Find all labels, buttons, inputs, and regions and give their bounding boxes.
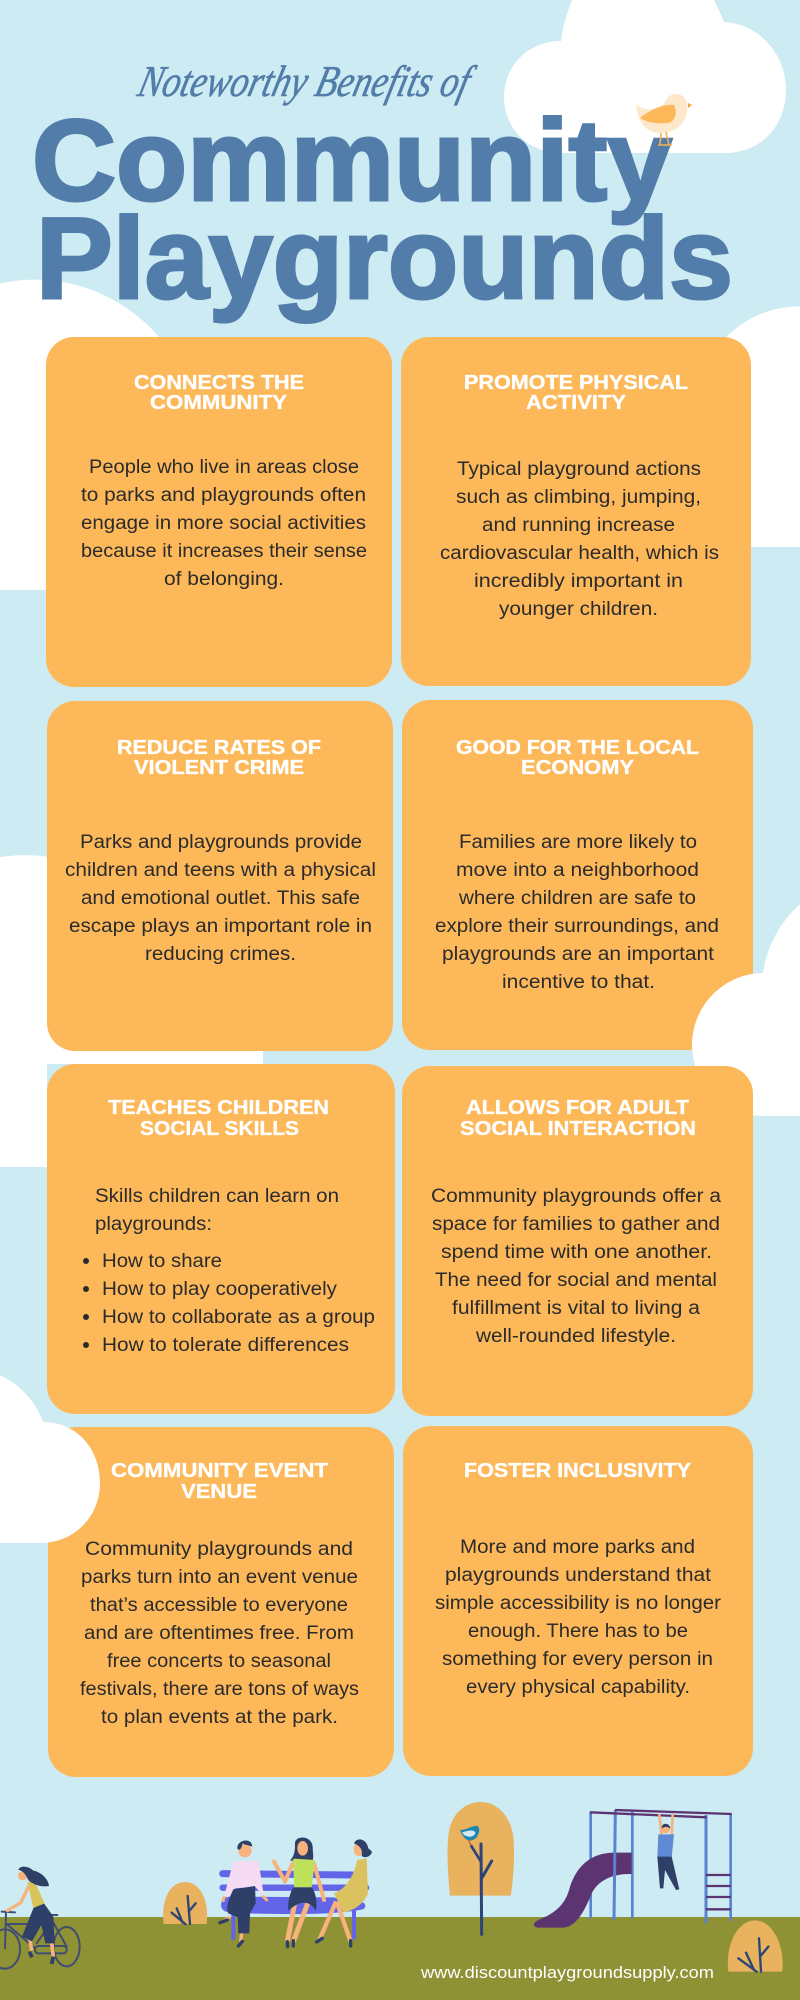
panel: reduce rates of violent crime (47, 701, 393, 1051)
icon: small bird on the title (636, 94, 692, 145)
panel: reduce rates of violent crime: children and teens with a physical (65, 860, 376, 881)
icon: tall bush with tree and bird (447, 1802, 514, 1934)
panel: community event venue: festivals, there are tons of ways (80, 1679, 359, 1700)
panel: promote physical activity: Typical playground actions (457, 459, 701, 480)
panel: reduce rates of violent crime: and emotional outlet. This safe (81, 888, 360, 909)
right half of park scene (447, 1802, 783, 1972)
illustration: woman in pink blouse (220, 1840, 267, 1946)
panel: promote physical activity: such as climbing, jumping, (456, 487, 701, 508)
bullet list: How to collaborate as a group (102, 1307, 375, 1328)
panel: community event venue (48, 1427, 394, 1777)
panel: foster inclusivity: FOSTER INCLUSIVITY (464, 1460, 692, 1482)
illustration: woman in green top (274, 1837, 324, 1947)
panel: promote physical activity: younger children. (499, 599, 658, 620)
panel: promote physical activity: cardiovascular health, which is (440, 543, 719, 564)
panel: foster inclusivity: something for every person in (442, 1649, 713, 1670)
bullet list: How to tolerate differences (102, 1335, 349, 1356)
panel: community event venue: to plan events at the park. (101, 1707, 338, 1728)
panel: good for the local economy: where children are safe to (458, 888, 696, 909)
panel: allows for adult social interaction: SOCIAL INTERACTION (460, 1118, 696, 1140)
panel: good for the local economy: incentive to that. (502, 972, 655, 993)
panel: promote physical activity: PROMOTE PHYSICAL (464, 372, 688, 394)
ground (0, 1917, 800, 2000)
cloud: top right (504, 0, 786, 153)
panel: teaches children social skills: Skills children can learn on (95, 1186, 339, 1207)
panel: connects the community: to parks and playgrounds often (81, 485, 366, 506)
panel: foster inclusivity: enough. There has to be (468, 1621, 688, 1642)
cloud: lower left (0, 1373, 100, 1543)
panel: allows for adult social interaction: well-rounded lifestyle. (475, 1326, 676, 1347)
panel: reduce rates of violent crime: escape plays an important role in (69, 916, 372, 937)
panel: good for the local economy: playgrounds are an important (442, 944, 715, 965)
panel: teaches children social skills (47, 1064, 395, 1414)
panel: community event venue: VENUE (181, 1481, 257, 1503)
bullet list: How to share (102, 1251, 222, 1272)
panel: foster inclusivity: More and more parks and (460, 1537, 695, 1558)
title: Community Playgrounds (32, 97, 733, 323)
icon: bottom-right bush (728, 1920, 783, 1972)
title: Community Playgrounds: Community (32, 97, 672, 225)
panel: community event venue: that’s accessible to everyone (90, 1595, 348, 1616)
icon: small bush (163, 1882, 207, 1924)
panel: promote physical activity: and running increase (482, 515, 675, 536)
panel: promote physical activity (401, 337, 751, 686)
panel: good for the local economy: ECONOMY (521, 757, 635, 779)
panel: promote physical activity: incredibly important in (474, 571, 683, 592)
panel: reduce rates of violent crime: reducing crimes. (145, 944, 296, 965)
panel: good for the local economy: explore their surroundings, and (435, 916, 719, 937)
panel: community event venue: free concerts to seasonal (107, 1651, 331, 1672)
panel: allows for adult social interaction: space for families to gather and (432, 1214, 720, 1235)
panel: connects the community: COMMUNITY (150, 392, 288, 414)
cloud: middle right (692, 900, 800, 1116)
illustration: bench (221, 1874, 366, 1940)
panel: community event venue: parks turn into an event venue (81, 1567, 358, 1588)
left half of park scene (0, 1837, 372, 1969)
panel: foster inclusivity: playgrounds understand that (445, 1565, 712, 1586)
illustration: child hanging from bars (657, 1815, 679, 1890)
panel: community event venue: and are oftentimes free. From (84, 1623, 354, 1644)
script subtitle: Noteworthy Benefits of (133, 57, 480, 106)
panel: teaches children social skills: TEACHES CHILDREN (108, 1097, 329, 1119)
panel: connects the community: engage in more social activities (81, 513, 366, 534)
panel: allows for adult social interaction: The need for social and mental (435, 1270, 717, 1291)
illustration: cyclist (0, 1867, 80, 1969)
panel: allows for adult social interaction (402, 1066, 753, 1416)
panel: connects the community: CONNECTS THE (134, 372, 304, 394)
panel: allows for adult social interaction: Community playgrounds offer a (431, 1186, 721, 1207)
panel: allows for adult social interaction: spend time with one another. (441, 1242, 712, 1263)
panel: promote physical activity: ACTIVITY (526, 392, 627, 414)
panel: community event venue: COMMUNITY EVENT (111, 1460, 328, 1482)
panel: allows for adult social interaction: fulfillment is vital to living a (452, 1298, 700, 1319)
panel: connects the community: because it increases their sense (81, 541, 367, 562)
panel: foster inclusivity: every physical capability. (466, 1677, 690, 1698)
website url: www.discountplaygroundsupply.com (420, 1964, 714, 1982)
cloud: upper left (0, 280, 160, 590)
panel: connects the community (46, 337, 392, 687)
panel: connects the community: People who live in areas close (89, 457, 359, 478)
illustration: purple slide and monkey bars (534, 1810, 732, 1928)
panel: reduce rates of violent crime: Parks and playgrounds provide (80, 832, 362, 853)
panel: allows for adult social interaction: ALLOWS FOR ADULT (466, 1097, 689, 1119)
title: Community Playgrounds: Playgrounds (36, 195, 733, 323)
panel: reduce rates of violent crime: REDUCE RATES OF (117, 737, 321, 759)
illustration: woman in yellow dress (317, 1839, 372, 1946)
panel: connects the community: of belonging. (164, 569, 284, 590)
bullet list: How to play cooperatively (102, 1279, 338, 1300)
panel: foster inclusivity (403, 1426, 753, 1776)
panel: teaches children social skills: playgrounds: (95, 1214, 212, 1235)
cloud: upper right (725, 306, 800, 547)
panel: good for the local economy: GOOD FOR THE LOCAL (456, 737, 699, 759)
panel: teaches children social skills: SOCIAL SKILLS (140, 1118, 299, 1140)
panel: good for the local economy: Families are more likely to (459, 832, 697, 853)
panel: reduce rates of violent crime: VIOLENT CRIME (134, 757, 304, 779)
panel: good for the local economy (402, 700, 753, 1050)
bullet list (83, 1251, 375, 1356)
cloud: middle left (0, 855, 263, 1167)
panel: foster inclusivity: simple accessibility is no longer (435, 1593, 722, 1614)
panel: community event venue: Community playgrounds and (85, 1539, 353, 1560)
panel: good for the local economy: move into a neighborhood (456, 860, 699, 881)
